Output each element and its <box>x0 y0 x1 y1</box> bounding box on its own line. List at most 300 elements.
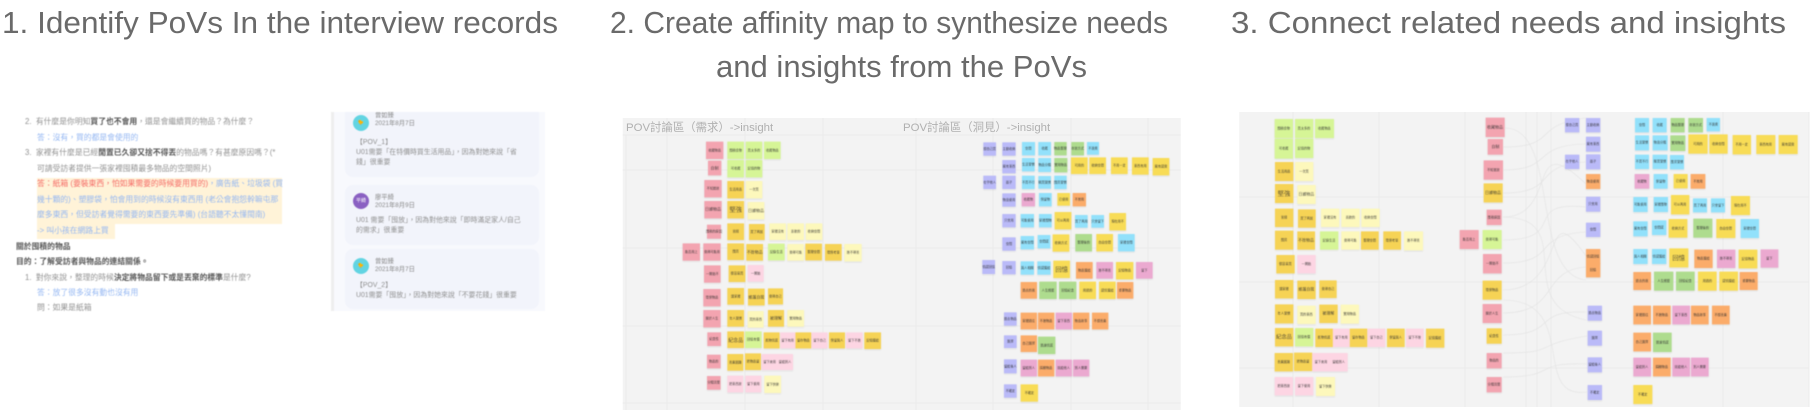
sticky notes: insights board: 回憶紀念 <box>1061 287 1075 292</box>
sticky notes: needs board: 囤積食物 <box>729 147 742 152</box>
sticky notes: needs board: 家裡沒有 <box>771 229 784 234</box>
sticky notes: needs board: 維護自我 <box>748 293 764 299</box>
panel: affinity map <box>623 118 1181 410</box>
sticky notes: linked needs: 被理解 <box>1322 310 1334 316</box>
connection lines between needs and insights <box>1503 118 1587 392</box>
sticky notes: insights board: 現在用不 <box>1111 219 1125 224</box>
sticky notes: linked needs: 年人習慣 <box>1278 311 1291 316</box>
sticky notes: linked insights: 物品整理 <box>1671 122 1685 127</box>
comment text <box>356 281 517 299</box>
sticky notes: needs board: 留下有用 <box>781 337 794 342</box>
sticky notes: needs board: 很容易買 <box>731 271 744 276</box>
sticky notes: linked insights: 收藏 <box>1657 122 1664 127</box>
sticky notes: insights board: 別人需要 <box>1075 365 1087 370</box>
sticky notes: insights board: 存放方式 <box>1071 146 1085 151</box>
sticky notes: linked insights <box>1565 118 1798 404</box>
sticky notes: insights board: 留下 <box>1141 267 1147 272</box>
sticky notes: linked needs: 留下不捨 <box>1408 335 1422 340</box>
sticky notes: linked insights: 物品故事 <box>1693 312 1707 317</box>
sticky notes: linked insights: 感情連結 <box>1722 278 1735 283</box>
sticky notes: needs board: 日據物品 <box>748 207 764 213</box>
sticky notes: needs board: 留下使用 <box>747 381 760 386</box>
sticky notes: linked needs: 能否用上 <box>1463 236 1475 241</box>
sticky notes: linked insights: 留給後人 <box>1588 362 1602 367</box>
sticky notes: insights board: 情感回憶 <box>982 264 996 269</box>
sticky notes: insights board: 囤貨習慣 <box>1054 179 1067 184</box>
sticky notes: linked insights: 保留物 <box>1656 178 1665 183</box>
sticky notes: insights board: 擁有東西 <box>1003 164 1015 169</box>
sticky notes: linked needs: 覺得可能 <box>1344 237 1357 242</box>
answer 3: 答：紙箱 (要裝東西，怕如果需要的時候要用買的)，廣告紙、垃圾袋 (買 <box>37 179 283 188</box>
sticky notes: linked needs: 保留與人 <box>1389 335 1403 340</box>
sticky notes: insights board: 家裡過往 <box>1022 318 1036 323</box>
avatar: 🐤 <box>358 120 364 126</box>
sticky notes: linked needs: 一開始不 <box>1486 261 1499 266</box>
sticky notes: linked needs: 買了再說 <box>1300 215 1314 220</box>
sticky notes: insights board: 不確定 <box>1006 388 1016 393</box>
sticky notes: linked needs: 環保考量 <box>1386 237 1399 242</box>
sticky notes: insights board: 家裡空間 <box>1120 240 1133 245</box>
sticky notes: linked needs: 收納空間 <box>1364 215 1377 220</box>
sticky notes: insights board: 重要物品 <box>1119 287 1131 292</box>
sticky notes: linked insights: 捨不得丟 <box>1720 256 1732 261</box>
comment text <box>356 138 517 166</box>
sticky notes: linked needs: 留下快樂 <box>1319 383 1332 388</box>
sticky notes: needs board: 環保物品 <box>706 295 718 300</box>
sticky notes: linked needs: 留下來用 <box>1315 359 1327 364</box>
sticky notes: linked insights: 物品連結 <box>1697 256 1710 261</box>
sticky notes: linked needs: 留給別人 <box>1332 359 1346 364</box>
sticky notes: needs board: 覺得可能用 <box>704 249 720 254</box>
sticky notes: linked needs: 日據物品 <box>1298 191 1314 197</box>
sticky notes: linked needs: 日據物品 <box>1485 189 1501 195</box>
date: 2021年8月9日 <box>375 202 415 209</box>
sticky notes: needs board: 堅強 <box>729 206 743 214</box>
sticky notes: insights board: 人生經歷 <box>1042 287 1054 292</box>
sticky notes: needs board: 自制 <box>711 164 719 170</box>
sticky notes: linked needs <box>1275 118 1505 396</box>
comment card 2 <box>345 185 539 245</box>
sticky notes: linked insights: 主動收納 <box>1587 122 1599 127</box>
sticky notes: needs board: 買的東西 <box>749 316 762 321</box>
board label: insights: POV討論區（洞見）->insight <box>903 120 1051 134</box>
comment text: U01需要「在特價時買生活用品」，因為對她來說「省 <box>356 149 517 156</box>
sticky notes: insights board: 情感連結 <box>1038 265 1050 270</box>
sticky notes: linked insights: 可以再用 <box>1674 202 1686 207</box>
sticky notes: needs board: 紀念品 <box>728 337 743 344</box>
sticky notes: needs board: 日據物品 <box>705 206 721 212</box>
sticky notes: insights board: 擁有感覺 <box>1155 164 1168 169</box>
sticky notes: insights board: 只會留下 <box>1091 218 1104 223</box>
sticky notes: linked needs: 覺得可能 <box>1486 236 1499 241</box>
sticky notes: linked needs: 留存物品 <box>1352 335 1365 340</box>
sticky notes: linked insights: 存放方式 <box>1689 122 1703 127</box>
sticky notes: linked needs: 捨不得丟 <box>1407 238 1420 243</box>
sticky notes: needs board: 記憶連結 <box>866 338 879 343</box>
sticky notes: insights board: 不用一定 <box>1113 163 1126 168</box>
sticky notes: insights board: 不確定 <box>1025 390 1035 395</box>
sticky notes: insights board: 已使用 <box>1059 196 1068 201</box>
sticky notes: linked needs: 生活用品 <box>1278 168 1290 173</box>
heading: step 3: 3. Connect related needs and insights <box>1231 6 1786 40</box>
sticky notes: insights board: 買了再用 <box>1075 218 1088 223</box>
sticky notes: linked insights: 不確定 <box>1590 389 1600 394</box>
sticky notes: insights board: 捐贈物品 <box>1040 365 1052 370</box>
sticky notes: needs board: 年人習慣 <box>729 315 743 320</box>
sticky notes: needs board: 記憶的物 <box>748 166 760 171</box>
sticky notes: linked insights: 收納方式 <box>1672 225 1685 230</box>
sticky notes: insights board: 記憶物品 <box>1118 268 1131 273</box>
sticky notes: linked needs: 維護自我 <box>1298 286 1314 292</box>
sticky notes: linked insights: 情感連結 <box>1653 253 1665 258</box>
sticky notes: linked needs: 把物品留 <box>1297 359 1309 364</box>
sticky notes: linked needs: 整理空間 <box>1363 237 1376 242</box>
sticky notes: insights board: 物品使用 <box>1003 197 1015 202</box>
sticky notes: needs board: 分類清楚 <box>707 380 721 385</box>
sticky notes: needs board: 環保考量 <box>827 249 840 254</box>
sticky notes: linked insights: 捐贈物品 <box>1655 364 1668 369</box>
sticky notes: linked insights: 面子 <box>1590 159 1596 164</box>
sticky notes: linked insights: 在乎他人 <box>1566 159 1579 164</box>
sticky notes: needs board: 收納空間 <box>808 229 820 234</box>
sticky notes: linked insights: 可能使用 <box>1634 201 1647 206</box>
sticky notes: linked needs: 環保物品 <box>1486 287 1498 292</box>
sticky notes: linked insights: 空間 <box>1590 227 1596 232</box>
sticky notes: insights board: 不浪費 <box>1088 145 1098 150</box>
sticky notes: insights board: 可能使用 <box>1021 218 1034 223</box>
sticky notes: insights board: 不常用 <box>1075 197 1084 202</box>
sticky notes: linked needs: 家裡沒有 <box>1324 215 1336 220</box>
sticky notes: insights board: 感情連結 <box>1101 287 1114 292</box>
sticky notes: insights board: 過去的我 <box>1022 287 1036 292</box>
sticky notes: linked insights: 物品分類 <box>1654 140 1667 145</box>
sticky notes: linked needs: 收藏物品 <box>1487 124 1503 130</box>
sticky notes: insights board: 物品連結 <box>1078 267 1091 272</box>
sticky notes: needs board: 囤積的原因 <box>706 229 722 234</box>
sticky notes: insights board: 只會用 <box>1004 218 1014 223</box>
sticky notes: linked insights: 與人相關 <box>1634 253 1647 258</box>
sticky notes: insights board: 擁有空間 <box>1021 240 1034 245</box>
sticky notes: insights board: 選擇 <box>1007 339 1013 344</box>
sticky notes: linked needs: 省錢 <box>1281 215 1288 220</box>
comment text: 【POV_2】 <box>356 282 392 289</box>
sticky notes: insights board: 過濾情感 <box>1040 342 1054 347</box>
sticky notes: insights board: 收納空間 <box>1091 163 1104 168</box>
section heading: 關於囤積的物品 <box>16 242 71 251</box>
sticky notes: linked insights: 過濾情感 <box>1656 339 1669 344</box>
sticky notes: needs board: 回憶有價 <box>747 337 760 342</box>
sticky notes: linked insights: 家裡囤物 <box>1654 201 1667 206</box>
sticky notes: insights board: 自己選擇 <box>1022 341 1035 346</box>
sticky notes: linked insights: 收藏物 <box>1637 178 1647 183</box>
sticky notes: linked insights: 留下 <box>1766 255 1772 260</box>
sticky notes: needs board: 不知道放 <box>707 186 720 191</box>
sticky notes: linked insights: 想自己買 <box>1566 122 1579 127</box>
sticky notes: needs board: 留存物品 <box>797 337 810 342</box>
sticky notes: insights board: 不捨物品 <box>1040 318 1052 323</box>
sticky notes: insights board: 可以再用 <box>1057 218 1069 223</box>
sticky notes: linked insights: 重要物品 <box>1742 278 1755 283</box>
sticky notes: linked insights: 送給他人 <box>1675 364 1688 369</box>
sticky notes: linked needs: 可收藏 <box>1279 146 1289 151</box>
sticky notes: linked insights: 別人需要 <box>1693 364 1706 369</box>
sticky notes: linked insights: 不用一定 <box>1735 142 1749 147</box>
sticky notes: linked needs: 留下有用 <box>1335 335 1348 340</box>
avatar: 🐤 <box>358 263 364 269</box>
sticky notes: linked insights: 情感回憶 <box>1587 253 1600 258</box>
question 3: 3. 家裡有什麼是已經閒置已久卻又捨不得丟的物品嗎？有甚麼原因嗎？(* <box>25 148 275 157</box>
sticky notes: insights board: 主動收納 <box>1003 146 1015 151</box>
sticky notes: needs board: 省錢 <box>733 229 740 234</box>
sticky notes: insights board <box>982 142 1169 402</box>
sticky notes: linked needs: 收藏物品 <box>1318 125 1331 130</box>
answer 3 line 4: -> 叫小孩在網路上買 <box>37 226 109 235</box>
sticky notes: linked insights: 擁有東西 <box>1587 141 1599 146</box>
sticky notes: needs board: 留下自己 <box>813 337 827 342</box>
sticky notes: linked insights: 不常用 <box>1693 178 1703 183</box>
answer 2: 答：沒有，買的都是會使用的 <box>37 133 138 142</box>
sticky notes: linked insights: 不確定 <box>1638 391 1648 396</box>
sticky notes: needs board: 物品的 <box>709 358 718 363</box>
sticky notes: insights board: 空間 <box>1006 241 1012 246</box>
sticky notes: linked insights: 整理後的 <box>1696 225 1709 230</box>
sticky notes: insights board: 不買不行 <box>1022 179 1035 184</box>
sticky notes: insights board: 物品分類 <box>1038 162 1052 167</box>
sticky notes: linked insights: 不捨物品 <box>1655 312 1668 317</box>
sticky notes: insights board: 想自己買 <box>983 146 997 151</box>
sticky notes: insights board: 東西有用 <box>1134 163 1147 168</box>
sticky notes: insights board: 留給後人 <box>1004 363 1017 368</box>
sticky notes: needs board: 留下不捨 <box>848 337 861 342</box>
sticky notes: linked insights: 不想丟棄 <box>1714 312 1727 317</box>
sticky notes: needs board: 把東西放 <box>729 381 742 386</box>
sticky notes: linked insights: 記憶物品 <box>1742 256 1754 261</box>
sticky notes: needs board: 覺得自己 <box>769 293 782 298</box>
sticky notes: linked insights: 留下東西 <box>1675 312 1687 317</box>
sticky notes: needs board: 買太多的 <box>748 147 760 152</box>
sticky notes: insights board: 空間 <box>1025 146 1031 151</box>
comment text: 錢」很重要 <box>356 159 390 166</box>
sticky notes: linked needs: 囤貨 <box>1281 237 1287 242</box>
sticky notes: linked insights: 囤貨習慣 <box>1671 159 1684 164</box>
comment text: U01需要「囤放」，因為對她來說「不要花錢」很重要 <box>356 292 517 299</box>
sticky notes: linked needs: 紀念性 <box>1489 333 1499 338</box>
sticky notes: insights board: 家裡囤物 <box>1039 218 1052 223</box>
sticky notes: insights board: 空間感 <box>1039 239 1050 244</box>
sticky notes: linked needs: 實用物品 <box>1343 311 1356 316</box>
sticky notes: insights board: 可用的 <box>1075 163 1084 168</box>
sticky notes: linked needs: 很容易買 <box>1279 261 1292 266</box>
sticky notes: linked needs: 自制 <box>1491 143 1499 149</box>
date: 2021年8月7日 <box>375 120 415 127</box>
sticky notes: linked needs: 堅強 <box>1278 190 1291 198</box>
sticky notes: linked needs: 喜歡的 <box>1346 215 1355 220</box>
sticky notes: needs board: 記錄生活 <box>770 249 783 254</box>
sticky notes: needs board: 留給別人 <box>779 359 792 364</box>
panel: interview record text <box>16 116 283 312</box>
sticky notes: linked insights: 生活習慣 <box>1636 140 1649 145</box>
sticky notes: linked needs: 留下自己 <box>1370 335 1383 340</box>
sticky notes: linked insights: 空間感 <box>1654 225 1665 230</box>
answer 3 line 3: 麼多東西，但受訪者覺得需要的東西要先準備) (台語聽不太懂閩南) <box>37 210 265 219</box>
question 3 continued: 可請受訪者提供一張家裡囤積最多物品的空間照片) <box>37 164 211 173</box>
sticky notes: needs board: 整理空間 <box>807 249 820 254</box>
sticky notes: linked needs: 分類清楚 <box>1488 382 1501 387</box>
panel: PoV comments <box>331 112 545 311</box>
sticky notes: linked needs: 一次買 <box>1299 168 1310 173</box>
author: 曾如臻 <box>375 112 394 119</box>
sticky notes: linked insights: 可用的 <box>1693 141 1703 146</box>
sticky notes: insights board: 收藏 <box>1042 146 1049 151</box>
sticky notes: insights board: 物品故事 <box>1075 318 1088 323</box>
sticky notes: linked insights: 過去的我 <box>1636 278 1649 283</box>
section goal: 目的：了解受訪者與物品的連結關係。 <box>16 257 149 266</box>
sticky notes: insights board: 不想丟棄 <box>1094 318 1106 323</box>
sticky notes: insights board: 物品整理 <box>1054 146 1067 151</box>
sticky notes: needs board: 一次買 <box>749 187 760 192</box>
sticky notes: needs board <box>683 142 881 393</box>
sticky notes: linked needs: 買的東西 <box>1300 312 1313 317</box>
avatar: 平綺 <box>356 198 366 204</box>
sticky notes: linked insights: 實用物品 <box>1671 140 1684 145</box>
sticky notes: linked insights: 自己選擇 <box>1636 339 1648 344</box>
sticky notes: needs board: 留下快樂 <box>766 381 779 386</box>
sticky notes: linked insights: 已使用 <box>1676 178 1685 183</box>
sticky notes: insights board: 自由空間 <box>1098 240 1111 245</box>
avatar <box>353 258 369 274</box>
answer 1: 答：放了很多沒有動也沒有用 <box>37 288 138 297</box>
sticky notes: linked needs: 記憶的物 <box>1298 145 1310 150</box>
sticky notes: linked insights: 擁有感覺 <box>1782 141 1795 146</box>
sticky notes: linked insights: 不浪費 <box>1709 122 1718 127</box>
sticky notes: linked needs: 一開始 <box>1302 261 1312 266</box>
author: 廖平綺 <box>375 194 394 201</box>
sticky notes: needs board: 一開始不 <box>706 271 719 276</box>
sticky notes: linked needs: 不知道放 <box>1487 167 1500 172</box>
panel: connected needs and insights <box>1239 112 1809 407</box>
heading: step 2: 2. Create affinity map to synthesize needs <box>610 6 1168 40</box>
sticky notes: insights board: 與人相關 <box>1021 265 1034 270</box>
sticky notes: linked needs: 不捨物品 <box>1298 236 1314 242</box>
sticky notes: linked needs: 囤積食物 <box>1277 125 1290 130</box>
sticky notes: linked needs: 記憶連結 <box>1429 335 1441 340</box>
sticky notes: linked needs: 囤積原因 <box>1488 214 1500 219</box>
sticky notes: needs board: 紀念性 <box>709 336 719 341</box>
question 1: 1. 對你來說，整理的時候決定將物品留下或是丟棄的標準是什麼? <box>25 273 251 282</box>
sticky notes: linked insights: 回憶 <box>1672 253 1686 262</box>
sticky notes: linked needs: 丟棄困難 <box>1277 359 1291 364</box>
sticky notes: linked insights: 買了再用 <box>1694 202 1706 207</box>
sticky notes: needs board: 生活用品 <box>729 187 742 192</box>
highlighted answer background <box>37 178 282 224</box>
sticky notes: needs board: 喜歡的 <box>791 229 800 234</box>
sticky notes: needs board: 買了再說 <box>750 229 764 234</box>
sticky notes: needs board: 讓家裡 <box>731 293 741 298</box>
sticky notes: linked insights: 東西有用 <box>1759 141 1772 146</box>
sticky notes: insights board: 購買習慣 <box>1038 179 1052 184</box>
comment text: U01 需要「囤放」，因為對他來說「即時滿足家人/自己 <box>356 217 521 224</box>
heading: step 2 <box>610 6 1168 84</box>
sticky notes: linked needs: 讓家裡 <box>1279 286 1290 291</box>
comment card 3 <box>345 249 539 309</box>
comment text <box>356 215 521 234</box>
sticky notes: linked insights: 用過的 <box>1703 278 1712 283</box>
highlighted answer last line background <box>37 224 115 239</box>
question 2: 2. 有什麼是你明知買了也不會用，還是會繼續買的物品？為什麼？ <box>25 117 254 126</box>
sticky notes: linked insights: 只會留下 <box>1712 202 1724 207</box>
sticky notes: needs board: 可收藏 <box>731 166 741 171</box>
heading: step 1: 1. Identify PoVs In the interview records <box>2 6 558 40</box>
sticky notes: linked insights: 擁有空間 <box>1634 226 1647 231</box>
sticky notes: insights board: 實用物品 <box>1054 162 1067 167</box>
comment text: 的需求」很重要 <box>356 227 404 234</box>
sticky notes: linked needs: 把東西放 <box>1277 383 1291 388</box>
sticky notes: insights board: 過去物品 <box>1004 316 1017 321</box>
sticky notes: needs board: 保留與人 <box>831 337 844 342</box>
sticky notes: linked insights: 家裡空間 <box>1743 225 1756 230</box>
sticky notes: linked needs: 紀念品 <box>1276 333 1292 341</box>
sticky notes: insights board: 保留物 <box>1041 197 1050 202</box>
comment text: 【POV_1】 <box>356 139 392 146</box>
sticky notes: insights board: 留下東西 <box>1057 318 1070 323</box>
sticky notes: linked insights: 家裡過往 <box>1636 312 1649 317</box>
sticky notes: linked insights: 自由空間 <box>1719 225 1732 230</box>
sticky notes: linked insights: 回憶 <box>1590 267 1597 272</box>
sticky notes: insights board: 回憶 <box>1006 265 1013 270</box>
sticky notes: insights board: 回憶 <box>1055 264 1069 273</box>
sticky notes: insights board: 整理後的 <box>1077 240 1090 245</box>
sticky notes: linked needs: 關於人生 <box>1486 310 1498 315</box>
sticky notes: linked needs: 覺得自己 <box>1322 286 1335 291</box>
sticky notes: linked needs: 記錄生活 <box>1323 237 1336 242</box>
avatar <box>353 115 369 131</box>
sticky notes: needs board: 收藏物品 <box>708 147 721 152</box>
sticky notes: insights board: 收藏物 <box>1024 197 1033 202</box>
sticky notes: needs board: 把物品留 <box>747 359 759 364</box>
sticky notes: linked insights: 回憶紀念 <box>1679 278 1692 283</box>
sticky notes: needs board: 不捨物品 <box>747 249 763 255</box>
sticky notes: insights board: 用過的 <box>1083 287 1092 292</box>
sticky notes: insights board: 面子 <box>1006 179 1012 184</box>
comment card 1 <box>345 100 539 177</box>
sticky notes: linked needs: 物品的 <box>1489 358 1499 363</box>
answer 3 line 2: 幾十顆的)、塑膠袋，怕會用到的時候沒有東西用 (老公會抱怨幹嘛屯那 <box>37 195 278 204</box>
sticky notes: linked insights: 購買習慣 <box>1654 159 1667 164</box>
sticky notes: needs board: 關於人生 <box>706 316 718 321</box>
author: 曾如臻 <box>375 258 394 265</box>
sticky notes: insights board: 在乎他人 <box>983 179 997 184</box>
sticky notes: linked insights: 選擇 <box>1592 335 1598 340</box>
sticky notes: linked insights: 物品使用 <box>1587 178 1599 183</box>
sticky notes: insights board: 留給別人 <box>1022 365 1036 370</box>
sticky notes: needs board: 舊物情感 <box>765 337 779 342</box>
sticky notes: linked insights: 收納空間 <box>1712 141 1725 146</box>
sticky notes: needs board: 實用物品 <box>789 315 802 320</box>
sticky notes: needs board: 丟棄困難 <box>729 359 742 364</box>
date: 2021年8月7日 <box>375 266 415 273</box>
sticky notes: needs board: 被理解 <box>770 315 782 321</box>
sticky notes: linked needs: 回憶有價 <box>1298 334 1311 339</box>
sticky notes: linked insights: 留給別人 <box>1636 364 1649 369</box>
sticky notes: insights board: 送給他人 <box>1057 365 1071 370</box>
sticky notes: insights board: 收納方式 <box>1055 240 1068 245</box>
sticky notes: linked insights: 現在用不 <box>1734 202 1747 207</box>
sticky notes: needs board: 覺得可能 <box>789 249 803 254</box>
avatar <box>353 193 369 209</box>
sticky notes: needs board: 能否用上 <box>685 249 698 254</box>
sticky notes: linked insights: 人生經歷 <box>1657 278 1670 283</box>
sticky notes: needs board: 留下來用 <box>763 359 776 364</box>
